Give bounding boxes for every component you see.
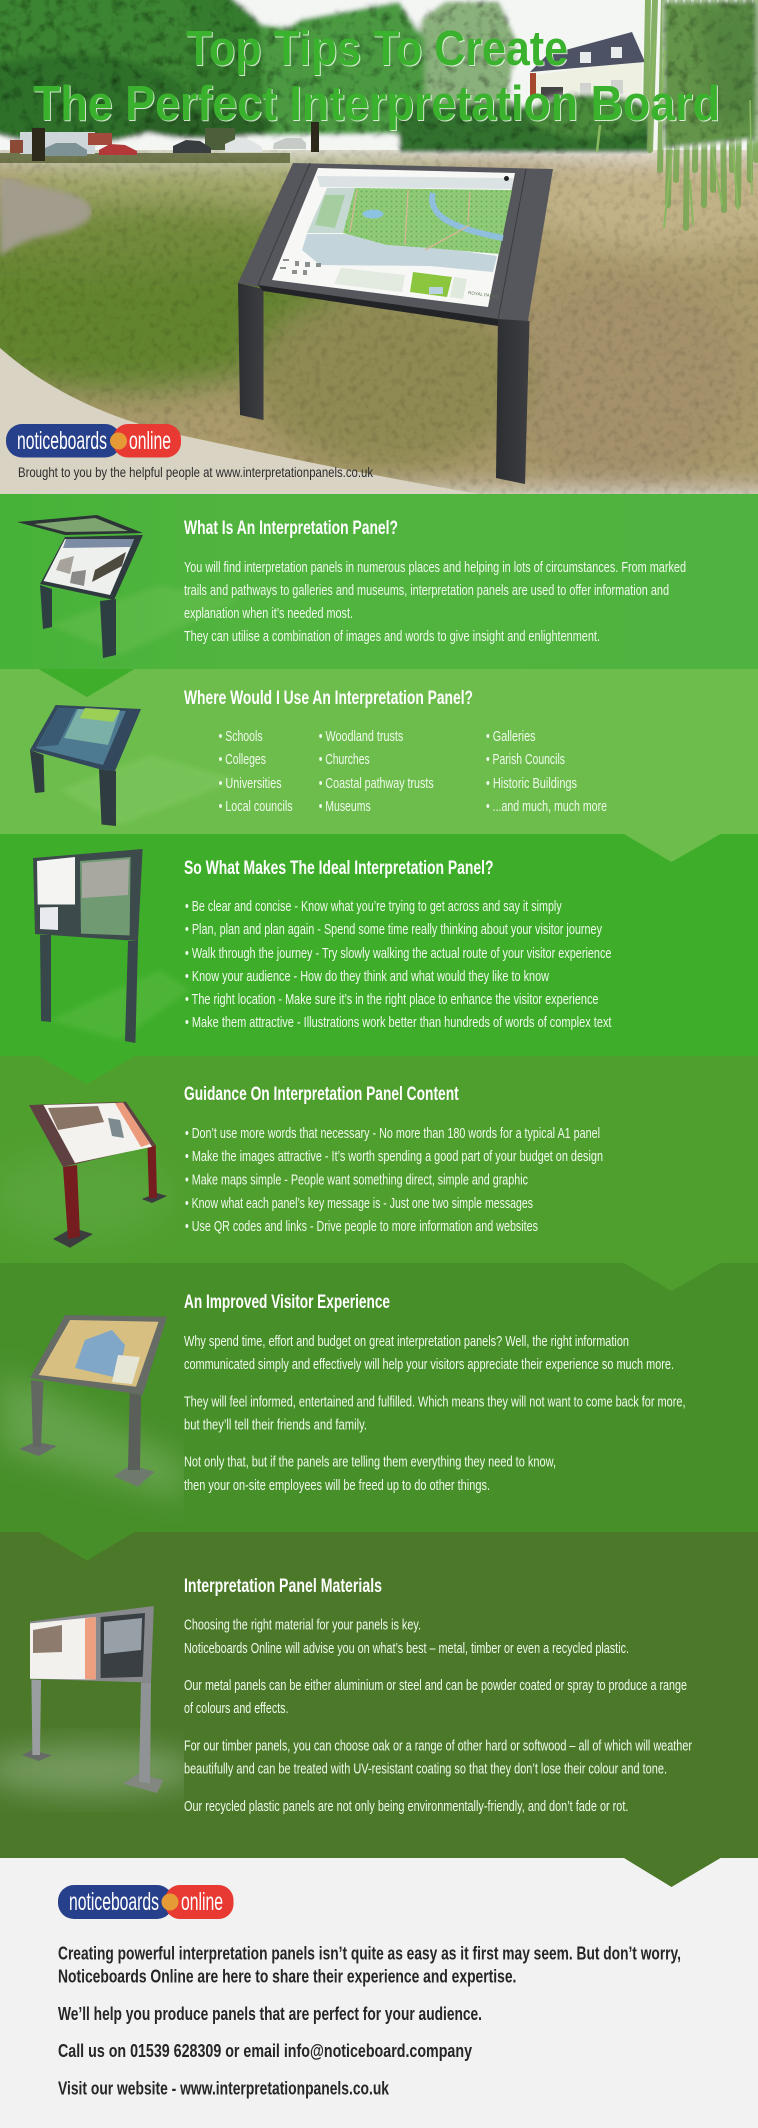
grass: [0, 150, 758, 500]
chevron: [38, 1532, 134, 1560]
closing text: Noticeboards Online are here to share their experience and expertise.: [58, 1966, 516, 1987]
contact details: Call us on 01539 628309 or email info@noticeboard.company: [58, 2040, 473, 2061]
bullet list: • The right location - Make sure it’s in the right place to enhance the visitor experience: [185, 992, 598, 1008]
illustration: noticeboard on posts: [33, 849, 143, 1043]
bullet list: • Plan, plan and plan again - Spend some time really thinking about your visitor journey: [185, 922, 603, 938]
bullet list: • Walk through the journey - Try slowly walking the actual route of your visitor experience: [185, 946, 612, 962]
body text: Not only that, but if the panels are telling them everything they need to know,: [184, 1455, 556, 1471]
list column 1: • Local councils: [219, 799, 293, 815]
list column 1: [219, 729, 293, 815]
list column 1: • Colleges: [219, 752, 266, 768]
illustration: aluminium double panel: [22, 1606, 163, 1793]
logo: noticeboards online: noticeboards: [69, 1888, 159, 1916]
chevron: [624, 1263, 720, 1291]
contact details: Visit our website - www.interpretationpanels.co.uk: [58, 2078, 390, 2098]
willow: [597, 0, 758, 228]
chevron: [38, 669, 134, 697]
body text: [184, 560, 686, 645]
heading: An Improved Visitor Experience: [184, 1292, 390, 1313]
list column 2: • Churches: [319, 752, 370, 768]
contact details: [58, 2040, 473, 2098]
heading: What Is An Interpretation Panel?: [184, 518, 398, 539]
logo: noticeboards online: online: [181, 1888, 223, 1916]
heading: So What Makes The Ideal Interpretation Panel?: [184, 858, 494, 879]
bullet list: • Make maps simple - People want something direct, simple and graphic: [185, 1172, 528, 1188]
illustration: map panel: [19, 1315, 167, 1487]
list column 3: • Parish Councils: [486, 752, 565, 768]
bullet list: • Be clear and concise - Know what you’re trying to get across and say it simply: [185, 899, 562, 915]
body text: [184, 1618, 692, 1815]
body text: Why spend time, effort and budget on great interpretation panels? Well, the right information: [184, 1334, 629, 1350]
body text: but they’ll tell their friends and family.: [184, 1418, 367, 1434]
chevron: [624, 834, 720, 862]
list column 3: • Historic Buildings: [486, 776, 577, 792]
car park: [10, 122, 319, 161]
trees: [0, 0, 652, 154]
body text: They can utilise a combination of images and words to give insight and enlightenment.: [184, 629, 600, 645]
panel: guidance on content: [0, 1056, 758, 1263]
bullet list: • Know what each panel’s key message is - Just one two simple messages: [185, 1196, 533, 1212]
bullet list: • Make them attractive - Illustrations work better than hundreds of words of complex text: [185, 1015, 612, 1031]
list column 3: • ...and much, much more: [486, 799, 607, 815]
closing text: [58, 1942, 681, 2024]
list column 2: • Coastal pathway trusts: [319, 776, 434, 792]
list column 2: [319, 729, 434, 815]
title: Top Tips To Create: [186, 22, 568, 76]
map graphic: [272, 168, 515, 307]
list column 3: [486, 729, 607, 815]
heading: Where Would I Use An Interpretation Panel?: [184, 688, 473, 709]
bullet list: • Use QR codes and links - Drive people to more information and websites: [185, 1219, 538, 1235]
body text: explanation when it’s needed most.: [184, 606, 353, 622]
body text: then your on-site employees will be freed up to do other things.: [184, 1478, 490, 1494]
title: [33, 22, 720, 131]
hero background: park scene: [0, 0, 758, 500]
heading: Guidance On Interpretation Panel Content: [184, 1084, 459, 1105]
bullet list: [185, 1126, 603, 1235]
list column 2: • Museums: [319, 799, 371, 815]
panel: materials: [0, 1532, 758, 1858]
map graphic: ROYAL PARKS: [468, 290, 499, 299]
panel: hero photo: [0, 0, 758, 500]
body text: [184, 1334, 686, 1494]
logo: noticeboards online: [58, 1885, 234, 1919]
closing text: We’ll help you produce panels that are perfect for your audience.: [58, 2003, 482, 2024]
list column 3: • Galleries: [486, 729, 536, 745]
heading: Interpretation Panel Materials: [184, 1576, 382, 1597]
illustration: blue panel: [30, 705, 141, 826]
hero tagline: Brought to you by the helpful people at www.interpretationpanels.co.uk: [18, 464, 374, 480]
house: [530, 32, 645, 104]
list column 1: • Universities: [219, 776, 282, 792]
panel: improved visitor experience: [0, 1263, 758, 1532]
body text: Our recycled plastic panels are not only being environmentally-friendly, and don’t fade or rot.: [184, 1799, 628, 1815]
list column 2: • Woodland trusts: [319, 729, 403, 745]
logo: noticeboards online: noticeboards: [17, 427, 107, 455]
panel: what is an interpretation panel: [0, 494, 758, 669]
chevron: [38, 1056, 134, 1084]
body text: Choosing the right material for your panels is key.: [184, 1618, 421, 1634]
bullet list: [185, 899, 612, 1031]
chevron: [624, 1858, 720, 1887]
bullet list: • Know your audience - How do they think and what would they like to know: [185, 969, 549, 985]
panel: ideal interpretation panel: [0, 834, 758, 1056]
list column 1: • Schools: [219, 729, 263, 745]
illustration: hinged panel: [17, 515, 143, 658]
body text: of colours and effects.: [184, 1701, 288, 1717]
panel: footer: [0, 1858, 758, 2128]
bullet list: • Don’t use more words that necessary - No more than 180 words for a typical A1 panel: [185, 1126, 600, 1142]
interpretation board photo: [238, 163, 553, 484]
illustration: red frame panel: [29, 1102, 167, 1248]
bullet list: • Make the images attractive - It’s worth spending a good part of your budget on design: [185, 1149, 603, 1165]
logo: noticeboards online: [6, 424, 181, 458]
logo: noticeboards online: online: [129, 427, 171, 455]
panel: where would i use: [0, 669, 758, 834]
